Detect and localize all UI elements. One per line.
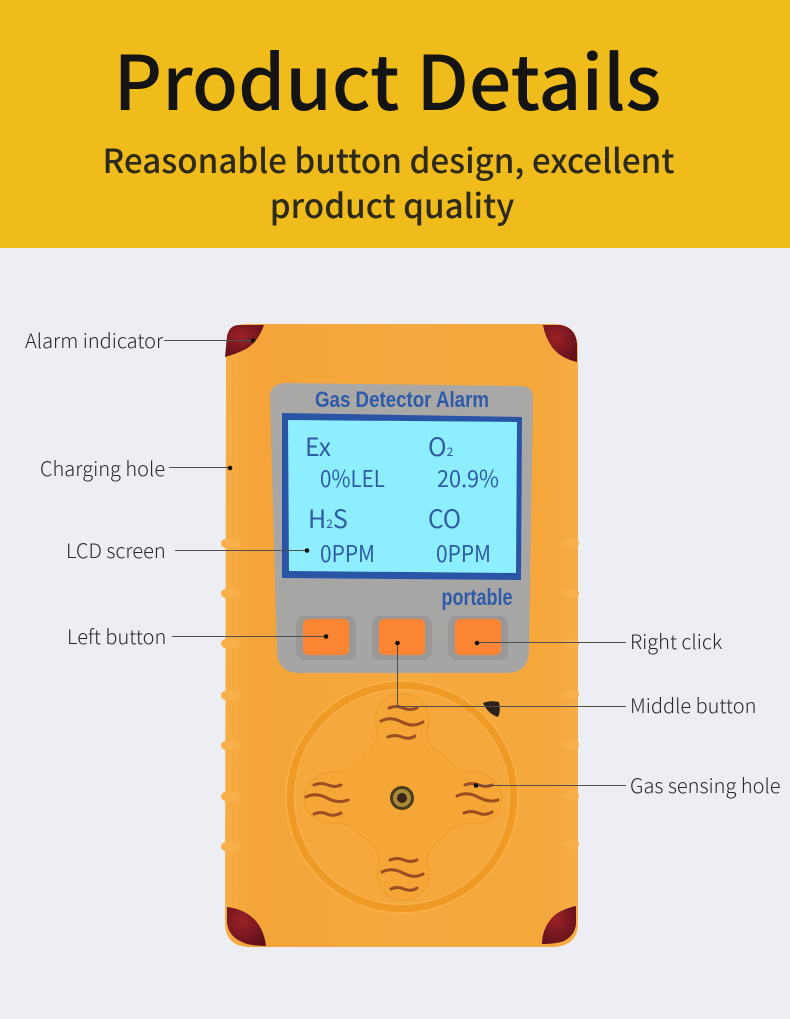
portable label: portable <box>442 584 512 610</box>
small hole <box>483 701 500 717</box>
leader dots <box>228 338 479 788</box>
subtitle: product quality <box>270 179 514 228</box>
sensor cover <box>286 681 518 913</box>
header banner <box>0 0 790 248</box>
label: right click: Right click <box>630 626 722 655</box>
LCD readings: CO <box>428 500 461 536</box>
LCD readings: 20.9% <box>437 460 499 494</box>
LCD readings: O2 <box>428 428 454 464</box>
icon: alarm lights <box>225 325 577 946</box>
device body <box>221 324 579 947</box>
label: left button: Left button <box>67 621 166 650</box>
LCD readings: H2S <box>308 500 348 536</box>
subtitle <box>102 134 674 228</box>
buttons <box>303 619 501 655</box>
button recesses <box>296 616 508 660</box>
subtitle: Reasonable button design, excellent <box>102 134 674 183</box>
label: LCD screen: LCD screen <box>66 535 166 564</box>
LCD readings: Ex <box>305 428 332 464</box>
LCD readings: 0PPM <box>436 535 491 569</box>
clover recess <box>304 694 502 900</box>
LCD readings <box>305 428 499 569</box>
label: gas sensing hole: Gas sensing hole <box>630 770 781 799</box>
label: middle button: Middle button <box>630 690 757 719</box>
center screw <box>390 786 414 810</box>
LCD readings: 0PPM <box>320 535 375 569</box>
label: charging hole: Charging hole <box>40 453 165 482</box>
gas holes <box>306 706 498 890</box>
LCD readings: 0%LEL <box>320 460 385 494</box>
LCD screen <box>282 413 522 580</box>
leader lines <box>164 340 626 786</box>
screen panel <box>270 383 533 673</box>
brand label: Gas Detector Alarm <box>315 387 489 412</box>
title: Product Details <box>114 23 661 132</box>
label: alarm indicator: Alarm indicator <box>25 325 163 354</box>
